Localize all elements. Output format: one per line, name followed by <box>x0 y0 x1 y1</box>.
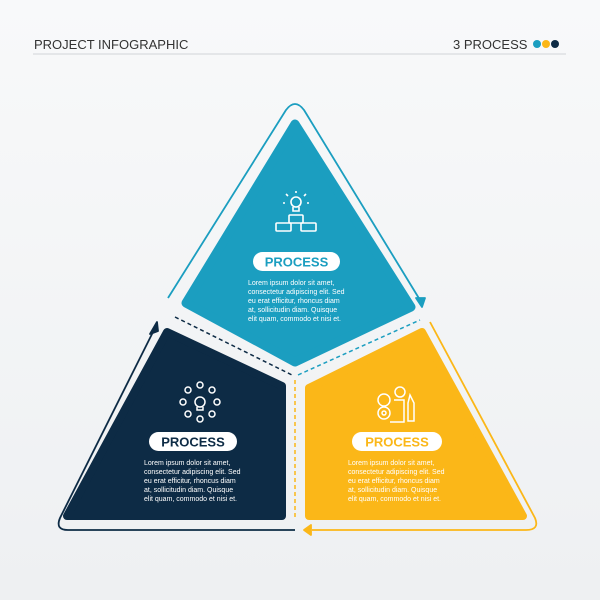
text block: Lorem ipsum dolor sit amet, <box>144 460 230 467</box>
text block: eu erat efficitur, rhoncus diam <box>348 478 440 485</box>
arrow: yellow outline <box>304 322 536 535</box>
label pill <box>352 432 442 451</box>
text block: at, sollicitudin diam. Quisque <box>144 487 233 494</box>
panel: teal top <box>186 124 411 362</box>
text block: consectetur adipiscing elit. Sed <box>348 469 445 476</box>
icon: gears bulb pencil <box>378 387 414 422</box>
text block: Lorem ipsum dolor sit amet, <box>248 280 334 287</box>
text block: elit quam, commodo et nisi et. <box>144 496 237 503</box>
icon: bulb network <box>180 382 220 422</box>
label pill <box>253 252 340 271</box>
panel: yellow right: PROCESS <box>365 434 429 450</box>
panel: yellow right <box>309 332 523 516</box>
text block: elit quam, commodo et nisi et. <box>348 496 441 503</box>
text block: eu erat efficitur, rhoncus diam <box>144 478 236 485</box>
arrow: teal outline <box>168 104 425 307</box>
label pill <box>149 432 237 451</box>
dashed dividers <box>175 317 420 520</box>
text block: at, sollicitudin diam. Quisque <box>248 307 337 314</box>
panel: teal top: PROCESS <box>265 254 329 270</box>
text block: Lorem ipsum dolor sit amet, <box>348 460 434 467</box>
text block: eu erat efficitur, rhoncus diam <box>248 298 340 305</box>
icon: lightbulb podium <box>276 191 316 231</box>
text block: at, sollicitudin diam. Quisque <box>348 487 437 494</box>
text block: consectetur adipiscing elit. Sed <box>144 469 241 476</box>
text block: consectetur adipiscing elit. Sed <box>248 289 345 296</box>
subtitle: 3 process: 3 PROCESS <box>453 37 528 52</box>
arrow: navy outline <box>59 322 295 530</box>
text block: elit quam, commodo et nisi et. <box>248 316 341 323</box>
title: PROJECT INFOGRAPHIC <box>34 37 188 52</box>
panel: navy left <box>67 332 282 516</box>
panel: navy left: PROCESS <box>161 434 225 450</box>
